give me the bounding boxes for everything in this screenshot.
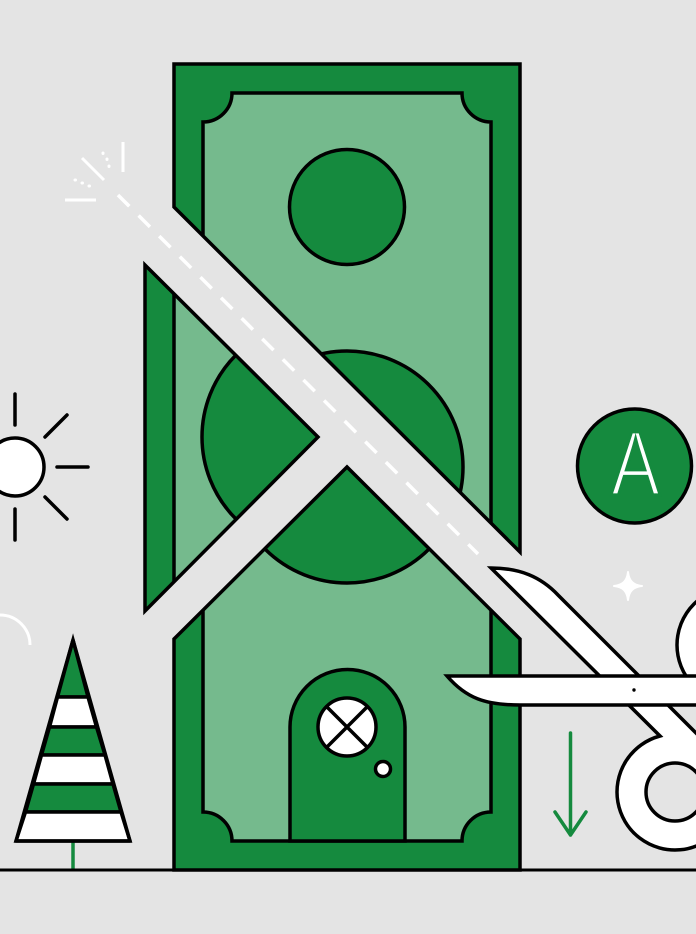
icon: sparkle xyxy=(614,572,642,600)
icon: letter A grade badge: A xyxy=(611,412,660,515)
ground line xyxy=(0,868,696,872)
banknote piece: left triangle xyxy=(143,260,320,616)
banknote: cut into three pieces xyxy=(145,34,520,870)
banknote piece: bottom with door xyxy=(172,464,522,872)
icon: sparks at the end of the cut xyxy=(65,142,123,200)
icon: letter A grade badge xyxy=(578,409,692,523)
icon: sun xyxy=(0,394,88,540)
scissors horizontal blade xyxy=(447,676,696,705)
arrow: pointing down xyxy=(555,733,586,835)
scissors handle hole xyxy=(646,763,696,821)
icon: door xyxy=(290,669,405,841)
icon: striped tree xyxy=(16,640,130,870)
icon: white arc xyxy=(0,615,30,645)
banknote piece: top xyxy=(172,62,522,556)
scissors pivot xyxy=(632,688,636,692)
icon: scissors xyxy=(447,568,696,850)
tree stripes xyxy=(16,640,130,841)
dashed cut line xyxy=(118,195,478,554)
tree trunk xyxy=(71,842,75,870)
scissors upper blade and lower handle xyxy=(491,568,696,850)
scissors upper handle xyxy=(677,587,696,703)
